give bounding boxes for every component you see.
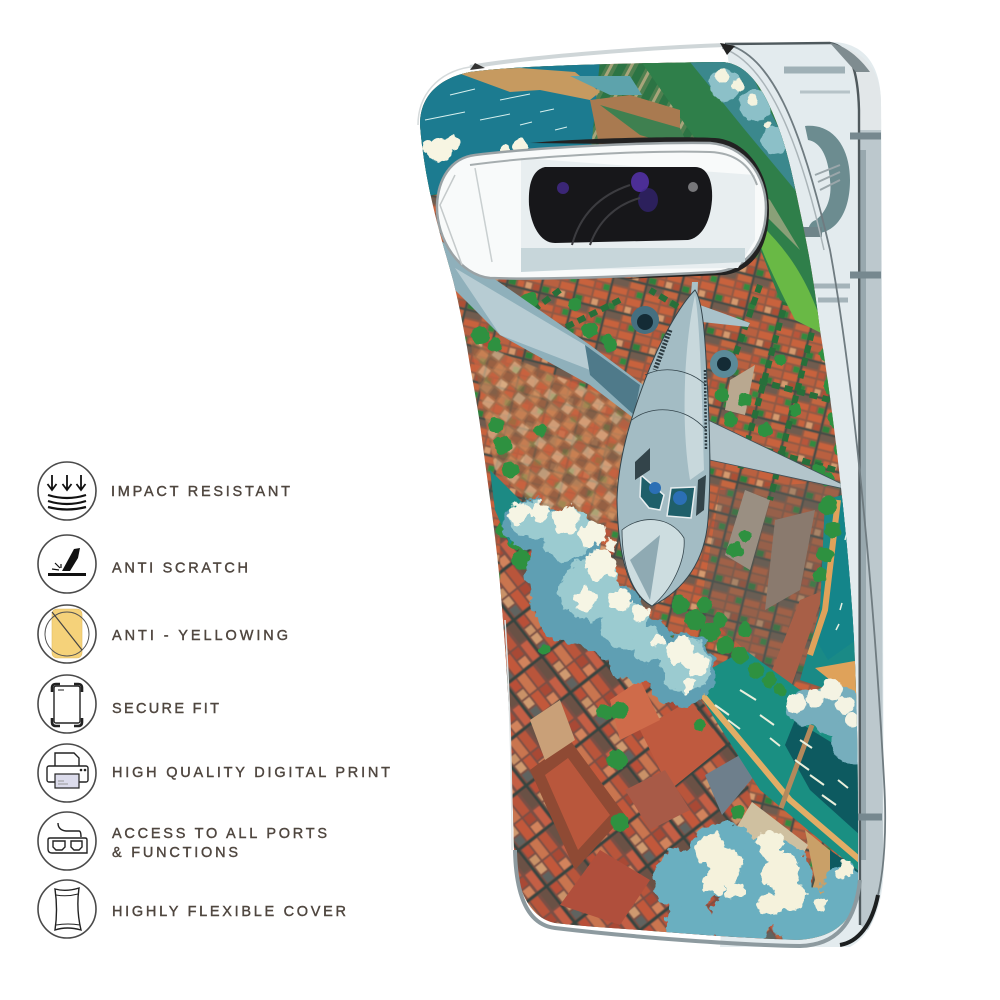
camera cutout: [437, 137, 769, 279]
green street lines: [520, 285, 835, 500]
feature: anti yellowing: [38, 605, 288, 663]
engines: [631, 306, 738, 378]
feature: anti scratch: ANTI SCRATCH: [112, 560, 248, 576]
cockpit windows: [635, 448, 706, 518]
sea strip on right: [800, 495, 856, 701]
left wing: [440, 240, 650, 420]
large central cloud: [504, 499, 716, 706]
tail: [690, 282, 750, 327]
phone behind the case: [720, 42, 884, 947]
right wing: [708, 420, 848, 489]
feature: access to all ports and functions: [38, 812, 327, 870]
feature: access to all ports and functions: ACCESS TO ALL PORTS: [112, 826, 327, 842]
feature: access to all ports and functions: & FUNCTIONS: [112, 845, 238, 861]
clouds upper: [422, 69, 789, 162]
top bay and land: [420, 62, 820, 333]
feature: highly flexible cover: [38, 880, 346, 938]
bottom right cloud: [652, 820, 858, 940]
feature: highly flexible cover: HIGHLY FLEXIBLE COVER: [112, 904, 346, 920]
feature: anti yellowing: ANTI - YELLOWING: [112, 628, 288, 644]
left river inlet: [490, 470, 522, 545]
airplane: [440, 240, 848, 606]
city base: [410, 50, 870, 960]
right cloud: [786, 678, 858, 764]
feature: impact resistant: IMPACT RESISTANT: [111, 484, 290, 500]
clear case edges: [418, 43, 885, 946]
fuselage: [617, 290, 710, 606]
river: [702, 650, 858, 940]
trees: [471, 292, 850, 831]
nose: [622, 520, 684, 606]
feature: impact resistant: [38, 462, 290, 520]
printed artwork on case: [420, 62, 858, 940]
infographic canvas: [37, 42, 886, 948]
feature: high quality digital print: HIGH QUALITY DIGITAL PRINT: [112, 765, 390, 781]
lens glints: [557, 172, 698, 245]
feature: high quality digital print: [38, 744, 390, 802]
feature: anti scratch: [38, 535, 248, 593]
panel: feature list: [38, 462, 390, 938]
feature: secure fit: SECURE FIT: [112, 701, 219, 717]
feature: secure fit: [38, 675, 219, 733]
